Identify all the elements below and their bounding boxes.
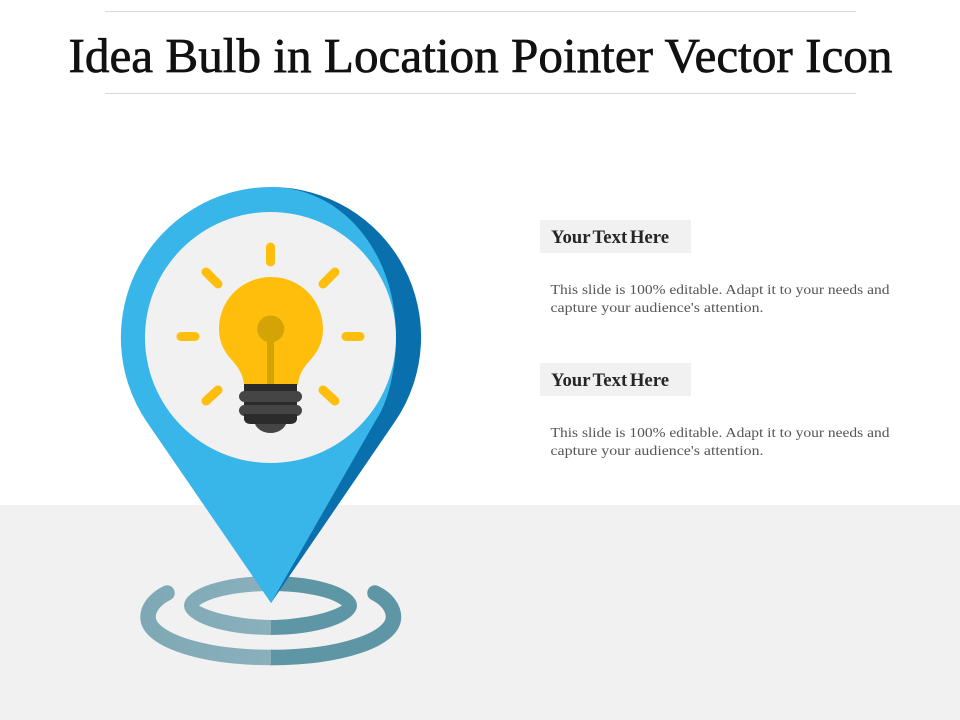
panel: second text block xyxy=(540,363,890,459)
floor band xyxy=(0,505,960,720)
title: Idea Bulb in Location Pointer Vector Icon xyxy=(68,28,893,83)
body text xyxy=(550,283,890,316)
outer ring xyxy=(148,593,394,665)
heading label xyxy=(540,363,691,396)
heading label: Your Text Here xyxy=(551,371,669,391)
glass xyxy=(219,277,323,385)
pin back shadow xyxy=(271,187,421,603)
panel: first text block xyxy=(540,220,890,316)
icon: location pin xyxy=(121,187,421,603)
icon: ground rings xyxy=(148,576,394,665)
body text xyxy=(550,426,890,459)
heading label xyxy=(540,220,691,253)
body text: This slide is 100% editable. Adapt it to your needs and xyxy=(550,426,890,441)
rays xyxy=(181,247,360,401)
filament xyxy=(257,316,284,385)
heading label: Your Text Here xyxy=(551,228,669,248)
body text: This slide is 100% editable. Adapt it to your needs and xyxy=(550,283,890,298)
screw base xyxy=(239,384,302,433)
body text: capture your audience's attention. xyxy=(550,301,764,316)
pin inner circle xyxy=(145,212,396,463)
inner ring xyxy=(184,576,357,635)
body text: capture your audience's attention. xyxy=(550,444,764,459)
pin front xyxy=(121,187,396,603)
icon: light bulb xyxy=(181,247,360,433)
